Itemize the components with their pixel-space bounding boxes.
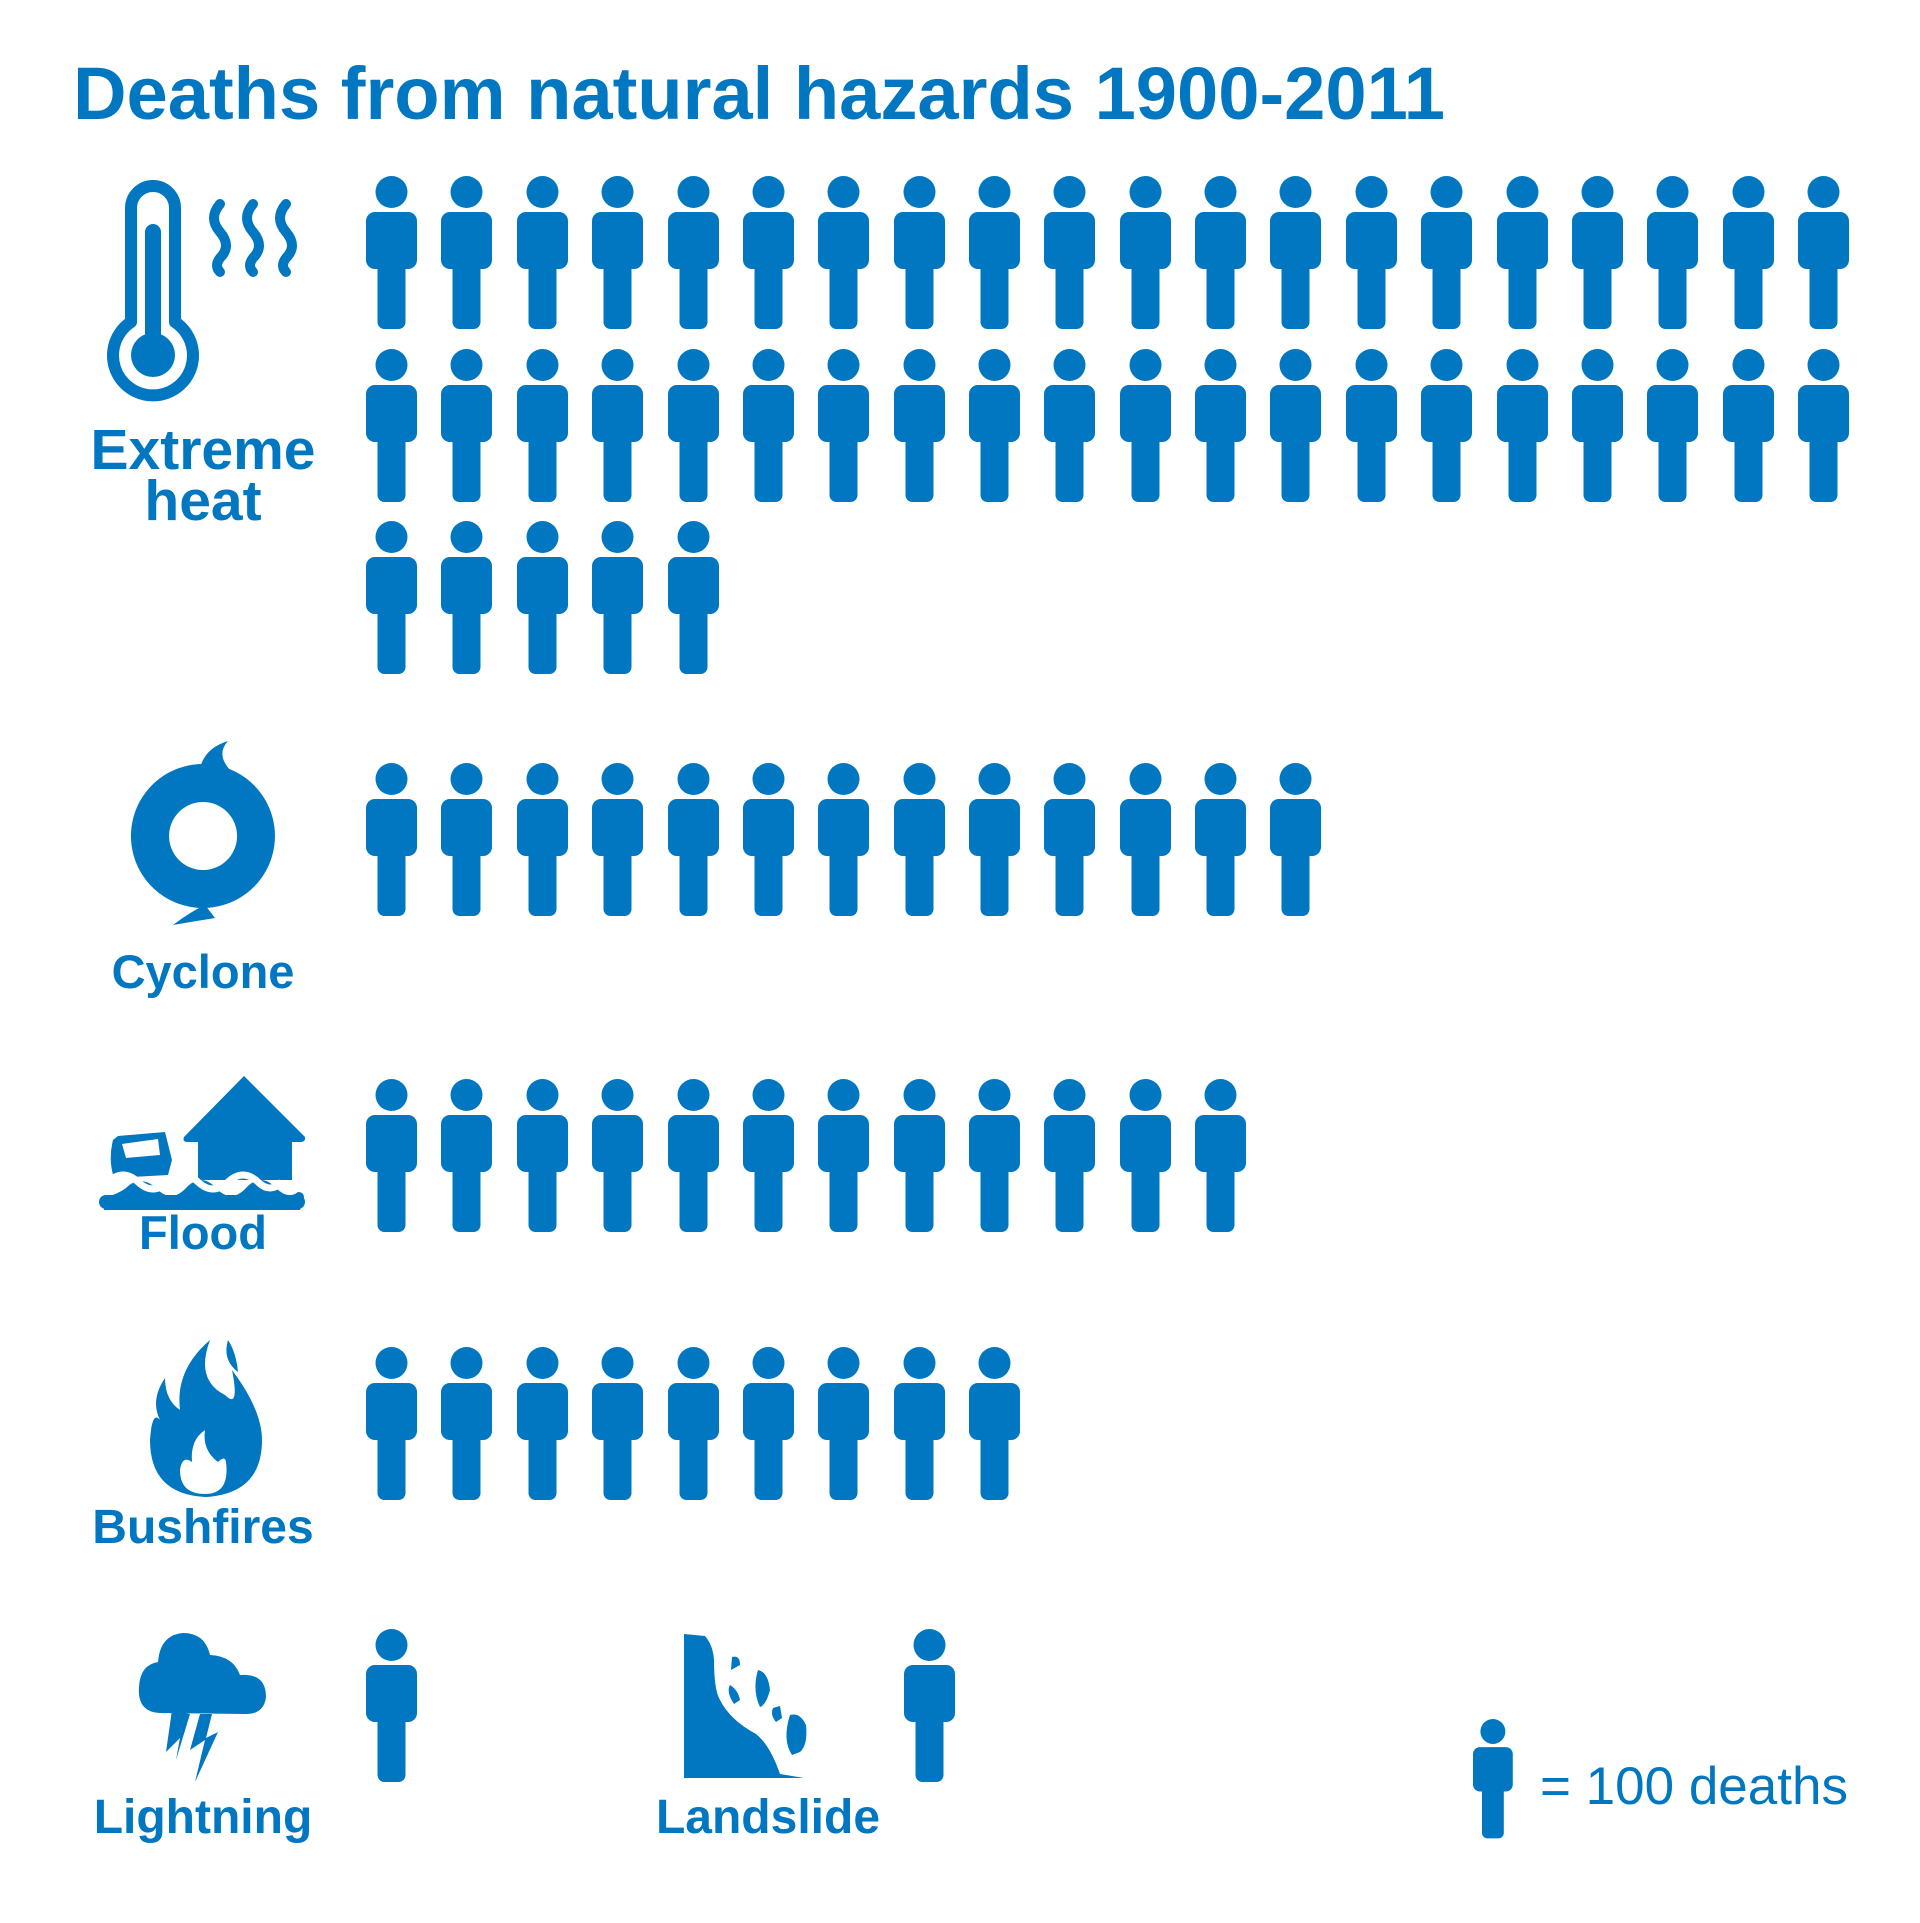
person: lightning: [366, 1629, 417, 1782]
icon: landslide: [684, 1634, 806, 1778]
label: flood: Flood: [139, 1206, 267, 1259]
icon: flood: [104, 1076, 305, 1210]
people row: flood: [366, 1079, 1246, 1232]
people row: bushfires: [366, 1347, 1020, 1500]
icon: thermometer: [113, 186, 292, 395]
label: extreme heat: Extreme: [91, 418, 315, 482]
person: landslide: [904, 1629, 955, 1782]
label: extreme heat: heat: [144, 469, 262, 533]
title: Deaths from natural hazards 1900-2011: [73, 52, 1445, 135]
icon: bushfire: [150, 1340, 262, 1497]
legend: = 100 deaths: [1540, 1757, 1848, 1816]
icon: cyclone: [131, 741, 275, 925]
legend: [1473, 1719, 1848, 1838]
people row: cyclone: [366, 763, 1321, 916]
icon: lightning cloud: [139, 1633, 266, 1782]
label: landslide: Landslide: [656, 1791, 880, 1844]
label: lightning: Lightning: [94, 1791, 312, 1844]
label: bushfires: Bushfires: [92, 1501, 314, 1554]
people row: extreme heat: [366, 176, 1849, 674]
label: cyclone: Cyclone: [112, 945, 294, 998]
